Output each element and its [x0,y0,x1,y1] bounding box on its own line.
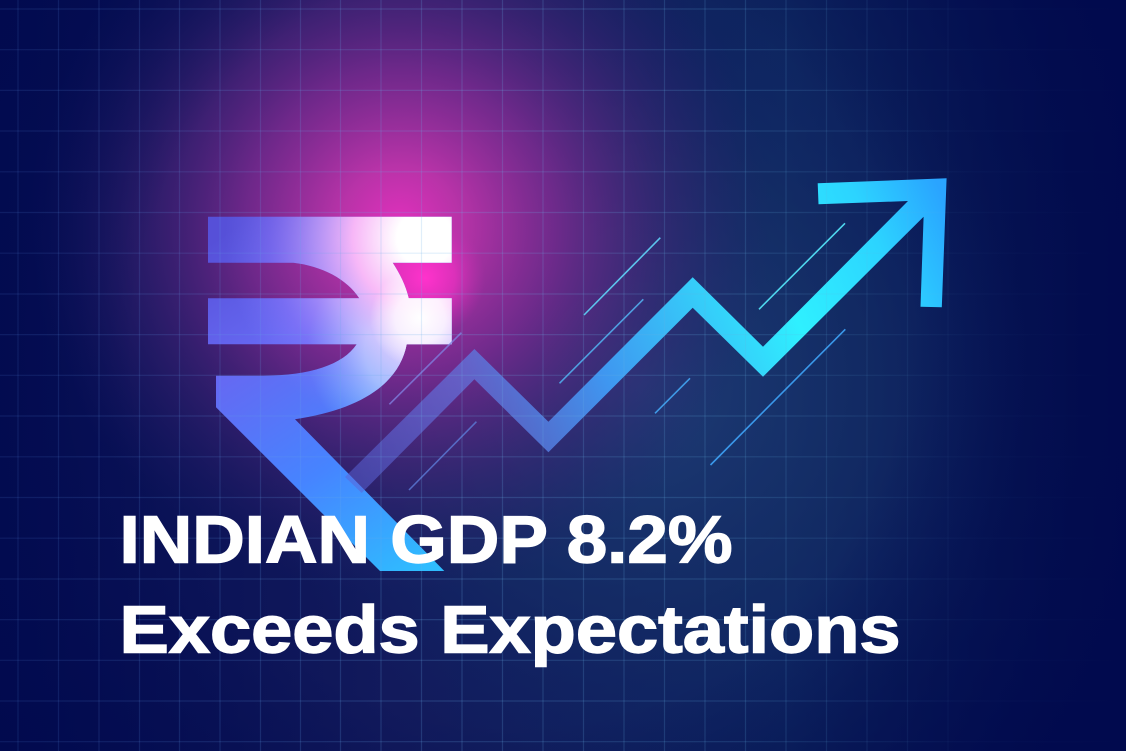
chart arrow: rising zigzag line [345,178,947,493]
motion lines beside the arrow [389,223,845,490]
title [120,504,901,667]
icon: rupee symbol [208,217,452,571]
title line 2: Exceeds Expectations [120,593,901,667]
title line 1: INDIAN GDP 8.2% [120,504,732,578]
